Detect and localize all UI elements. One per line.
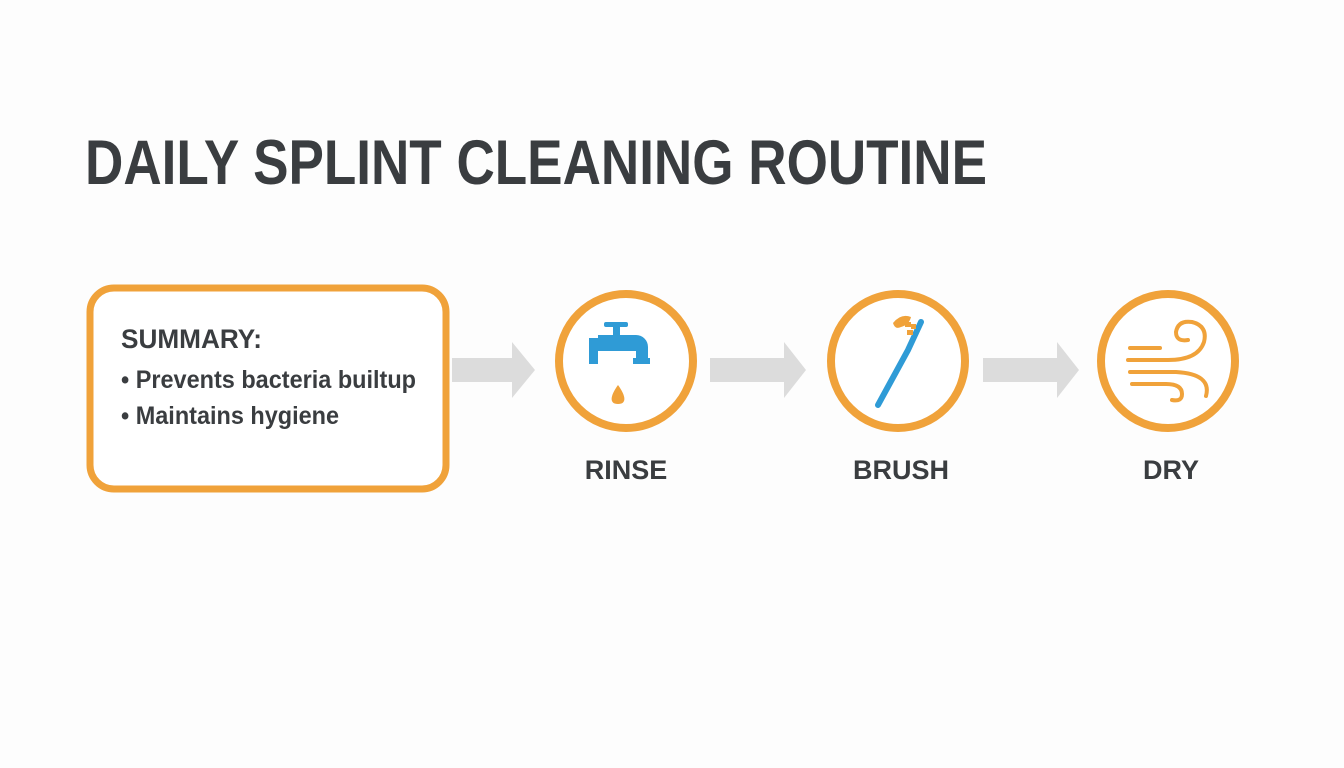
step: dry [1101,294,1235,485]
summary bullets: • Maintains hygiene [121,402,339,430]
title: DAILY SPLINT CLEANING ROUTINE [85,128,987,198]
icon: wind [1128,322,1207,400]
label: RINSE [585,455,667,485]
step: brush [831,294,965,485]
arrow 3 [983,342,1079,398]
panel: summary [90,288,446,489]
label: DRY [1143,455,1199,485]
summary heading: SUMMARY: [121,324,262,354]
icon: drop [612,385,624,404]
summary bullets [121,366,416,430]
arrow 2 [710,342,806,398]
icon: faucet [589,322,650,364]
label: BRUSH [853,455,949,485]
icon: toothbrush [878,322,921,405]
summary bullets: • Prevents bacteria builtup [121,366,416,394]
step: rinse [559,294,693,485]
arrow 1 [452,342,535,398]
